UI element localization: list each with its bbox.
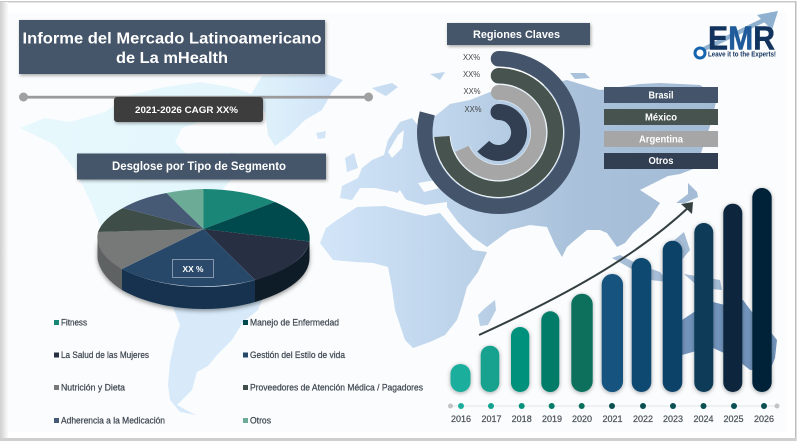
legend: Proveedores: Proveedores de Atención Médica / Pagadores xyxy=(250,382,423,392)
map: Greenland xyxy=(250,74,343,146)
slice: Adherencia xyxy=(123,193,204,229)
year labels: 2023 xyxy=(663,414,683,424)
slice: Manejo de Enfermedad xyxy=(204,202,310,242)
year labels: 2024 xyxy=(693,414,714,424)
year labels: 2018 xyxy=(512,414,532,424)
slice: Otros xyxy=(166,189,204,229)
region: México: México xyxy=(645,112,677,124)
legend: Otros: Otros xyxy=(250,416,271,426)
year labels: 2025 xyxy=(723,414,744,424)
map: Japan xyxy=(676,183,698,203)
ring: Argentina xyxy=(462,85,539,172)
pie legend xyxy=(54,318,423,426)
pie value label xyxy=(172,260,214,278)
map: United Kingdom xyxy=(345,153,358,172)
map: South America xyxy=(165,280,262,415)
legend: Fitness: Fitness xyxy=(61,318,87,328)
pie value label: XX % xyxy=(182,264,204,274)
bar chart xyxy=(450,188,772,392)
ring: Brasil xyxy=(425,51,572,206)
region: Argentina: Argentina xyxy=(639,134,683,146)
slice: La Salud de las Mujeres xyxy=(204,229,310,280)
map: Eurasia xyxy=(340,80,717,257)
ring percentage labels: XX% xyxy=(463,70,480,79)
ring percentage labels: XX% xyxy=(464,105,482,114)
year labels: 2026 xyxy=(754,414,774,424)
legend: La Salud de las Mujeres: La Salud de las Mujeres xyxy=(61,350,149,360)
ring percentage labels: XX% xyxy=(464,87,480,96)
3D pie chart xyxy=(97,189,310,309)
heading: segment breakdown: Desglose por Tipo de Segmento xyxy=(112,161,286,173)
regions legend xyxy=(604,87,718,169)
map: Arctic islands xyxy=(372,72,590,96)
ring percentage labels xyxy=(463,53,482,114)
year labels: 2020 xyxy=(572,414,592,424)
growth arrow xyxy=(479,202,693,335)
logo ring xyxy=(695,48,705,58)
map: North America xyxy=(20,82,262,312)
title xyxy=(19,20,325,74)
slice: Proveedores xyxy=(98,208,204,232)
timeline xyxy=(448,403,780,409)
map: Iceland xyxy=(316,131,326,139)
legend: Gestión del Estilo de vida: Gestión del Estilo de vida xyxy=(250,350,345,360)
ring: México xyxy=(442,68,555,189)
EMR logo xyxy=(695,11,778,58)
slice: Gestión del Estilo de vida xyxy=(122,229,255,286)
heading: segment breakdown xyxy=(77,154,326,180)
map: Australia xyxy=(682,300,777,370)
year labels: 2019 xyxy=(542,414,562,424)
year labels: 2017 xyxy=(481,414,502,424)
CAGR badge: 2021-2026 CAGR XX% xyxy=(135,105,238,115)
region: Otros: Otros xyxy=(648,156,674,167)
year labels: 2016 xyxy=(451,414,471,424)
slider line xyxy=(19,92,373,102)
title: Informe del Mercado Latinoamericano xyxy=(22,30,322,48)
world map background xyxy=(20,72,722,415)
year labels: 2022 xyxy=(633,414,653,424)
map: Madagascar xyxy=(478,300,496,326)
legend: Nutrición y Dieta: Nutrición y Dieta xyxy=(61,382,125,392)
ring: Otros xyxy=(483,104,519,153)
legend: Adherencia: Adherencia a la Medicación xyxy=(61,416,165,426)
ring percentage labels: XX% xyxy=(463,53,480,62)
map: Africa xyxy=(320,206,487,348)
map: South-East Asia islands xyxy=(612,232,722,290)
CAGR badge xyxy=(114,97,263,122)
logo tagline: Leave it to the Experts! xyxy=(708,52,776,58)
slice: Fitness xyxy=(204,189,275,229)
pie side walls xyxy=(98,238,310,309)
heading: key regions xyxy=(447,23,590,45)
heading: key regions: Regiones Claves xyxy=(473,29,560,41)
logo letters: EMR xyxy=(708,20,775,56)
radial bar chart xyxy=(425,51,572,206)
slice: Nutrición y Dieta xyxy=(97,229,204,269)
map: Baltic and Black Sea gaps xyxy=(388,130,440,200)
logo arrow xyxy=(702,19,766,50)
legend: Manejo de Enfermedad: Manejo de Enfermedad xyxy=(250,318,339,328)
title: de La mHealth xyxy=(116,50,228,67)
year labels xyxy=(451,414,774,424)
region: Brasil: Brasil xyxy=(648,90,674,102)
year labels: 2021 xyxy=(602,414,623,424)
